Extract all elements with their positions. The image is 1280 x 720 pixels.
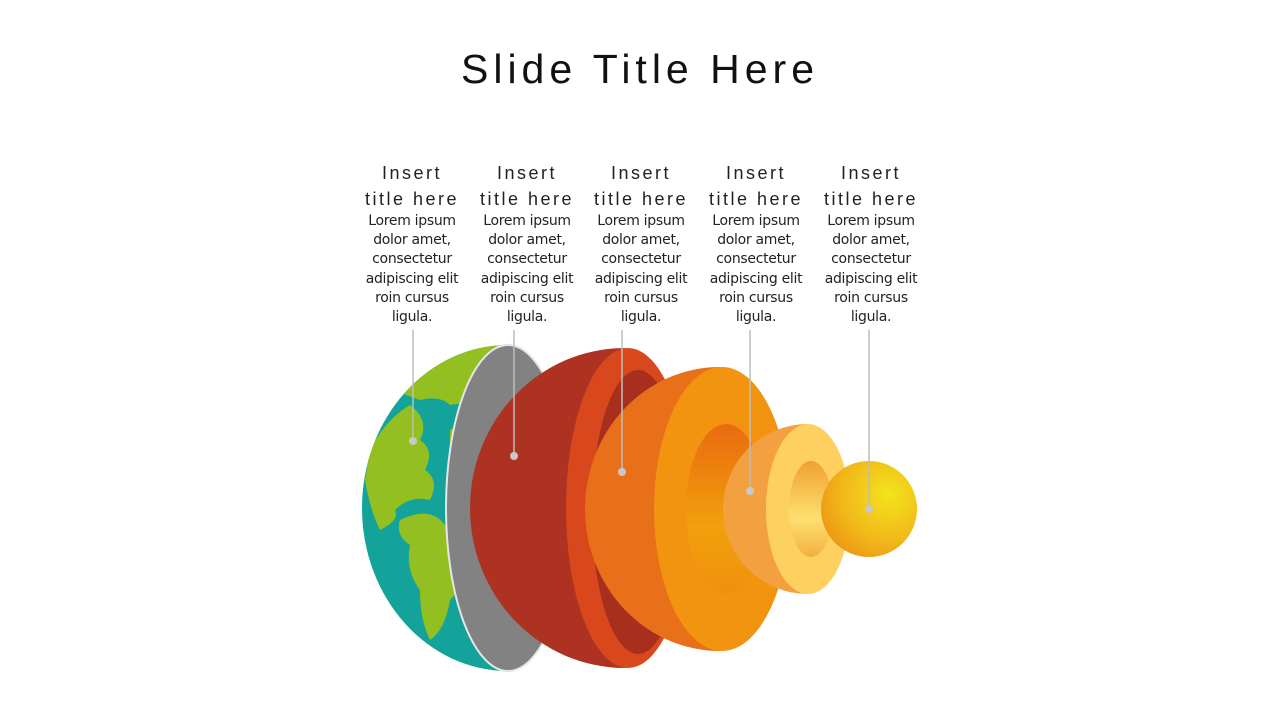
- text: column 2: Insert: [497, 163, 557, 183]
- text: column 4: [709, 163, 803, 325]
- text: column 3: [594, 163, 688, 325]
- core sphere: [821, 461, 917, 557]
- text: column 2: [480, 163, 574, 325]
- earth layers diagram: [362, 330, 917, 672]
- text: column 5: title here: [824, 189, 918, 209]
- text: column 3: title here: [594, 189, 688, 209]
- mantle layer (red): [470, 348, 690, 668]
- text: column 4: Lorem ipsum dolor amet, consectetur adipiscing elit roin cursus ligula.: [710, 213, 802, 325]
- text: column 1: title here: [365, 189, 459, 209]
- text: column 3: Lorem ipsum dolor amet, consectetur adipiscing elit roin cursus ligula.: [595, 213, 687, 325]
- text: column 4: Insert: [726, 163, 786, 183]
- text: column 1: [365, 163, 459, 325]
- outer core layer (orange): [585, 367, 790, 651]
- text: column 5: [824, 163, 918, 325]
- inner core layer (light orange): [723, 424, 850, 594]
- text: column 1: Lorem ipsum dolor amet, consectetur adipiscing elit roin cursus ligula.: [366, 213, 458, 325]
- pointer lines: [409, 330, 873, 513]
- text: column 4: title here: [709, 189, 803, 209]
- text: column 5: Lorem ipsum dolor amet, consectetur adipiscing elit roin cursus ligula.: [825, 213, 917, 325]
- globe crust: [362, 345, 501, 671]
- text: column 2: title here: [480, 189, 574, 209]
- text: column 5: Insert: [841, 163, 901, 183]
- text: column 1: Insert: [382, 163, 442, 183]
- title: Slide Title Here: [461, 46, 819, 92]
- text: column 2: Lorem ipsum dolor amet, consectetur adipiscing elit roin cursus ligula.: [481, 213, 573, 325]
- crust cut face (gray): [446, 345, 570, 671]
- text: column 3: Insert: [611, 163, 671, 183]
